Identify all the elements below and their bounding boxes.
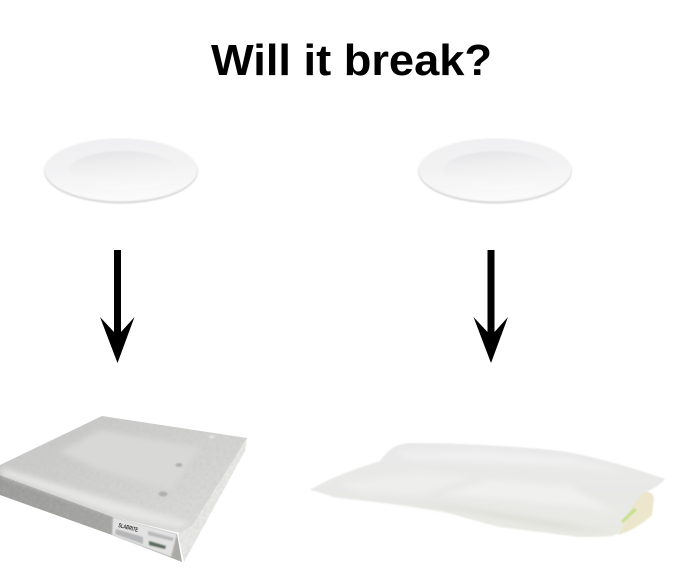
slab product label: SLABRITE bbox=[118, 523, 138, 534]
slab specks bbox=[158, 436, 215, 496]
pillow folds bbox=[340, 450, 625, 533]
icon: pillow bbox=[310, 443, 665, 537]
arrow: left plate to concrete slab bbox=[100, 250, 134, 363]
pillow inner insert bbox=[618, 491, 654, 535]
slab surface highlights bbox=[2, 430, 200, 529]
slab product label bbox=[112, 517, 177, 557]
arrow: right plate to pillow bbox=[474, 250, 508, 363]
pillow green tag bbox=[621, 508, 637, 523]
pillow body bbox=[310, 443, 665, 537]
slab right face bbox=[178, 438, 247, 562]
slab top face bbox=[0, 416, 247, 533]
slab front face bbox=[0, 475, 182, 562]
title: Will it break? bbox=[211, 36, 492, 85]
icon: right plate bbox=[418, 138, 572, 204]
icon: left plate bbox=[44, 138, 198, 204]
icon: concrete slab bbox=[0, 416, 247, 562]
